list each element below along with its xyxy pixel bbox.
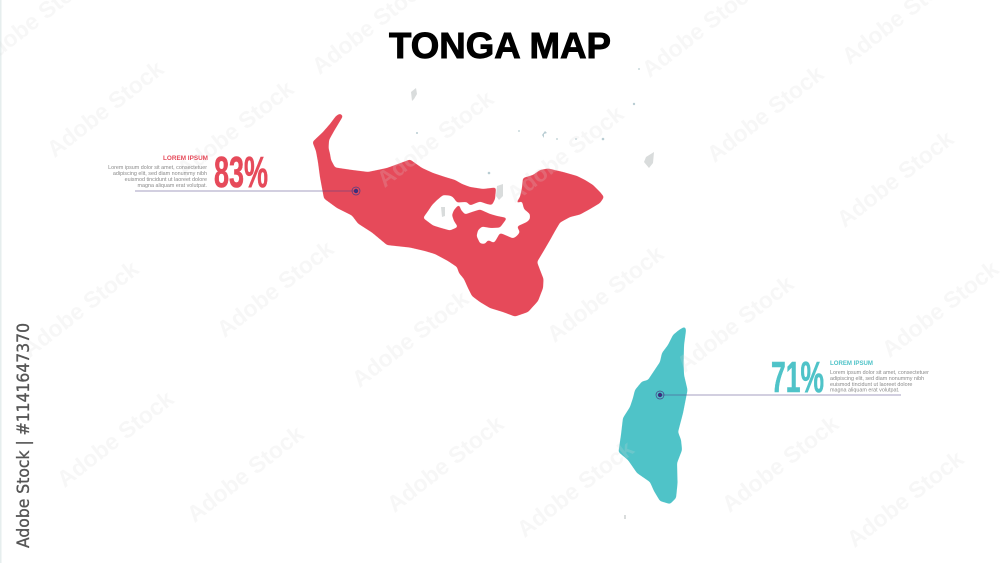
stock watermark pattern: Adobe Stock (512, 435, 639, 542)
stock credit: Adobe Stock | #1141647370 (14, 323, 34, 548)
callout body text: euismod tincidunt ut laoreet dolore (830, 382, 912, 388)
map: small grey islands (411, 68, 654, 519)
stock watermark pattern: Adobe Stock (372, 85, 499, 192)
callout body text: Lorem ipsum dolor sit amet, consectetuer (830, 370, 929, 376)
stock watermark pattern: Adobe Stock (347, 285, 474, 392)
stock watermark pattern: Adobe Stock (672, 270, 799, 377)
stock watermark pattern: Adobe Stock (832, 125, 959, 232)
title: TONGA MAP (389, 25, 611, 66)
callout body text: magna aliquam erat volutpat. (830, 388, 900, 394)
stock watermark pattern: Adobe Stock (502, 100, 629, 207)
stock watermark pattern: Adobe Stock (42, 55, 169, 162)
stock watermark pattern: Adobe Stock (877, 255, 1000, 362)
callout body text: Lorem ipsum dolor sit amet, consectetuer (108, 165, 207, 171)
map: red region (312, 114, 604, 316)
callout: red 83% (108, 148, 360, 197)
stock watermark pattern: Adobe Stock (212, 235, 339, 342)
stock watermark pattern: Adobe Stock (52, 385, 179, 492)
stock watermark pattern: Adobe Stock (182, 420, 309, 527)
stock watermark pattern: Adobe Stock (172, 75, 299, 182)
stock watermark pattern: Adobe Stock (382, 410, 509, 517)
stock watermark pattern: Adobe Stock (17, 255, 144, 362)
callout body text: magna aliquam erat volutpat. (137, 183, 207, 189)
callout body text (830, 370, 929, 394)
callout leader line (660, 394, 901, 396)
callout marker (656, 391, 664, 399)
stock watermark pattern: Adobe Stock (842, 445, 969, 552)
stock watermark pattern: Adobe Stock (542, 240, 669, 347)
callout body text: euismod tincidunt ut laoreet dolore (125, 177, 207, 183)
stock watermark pattern: Adobe Stock (717, 410, 844, 517)
callout body text (108, 165, 207, 189)
callout value: 83% (214, 148, 268, 197)
callout marker (352, 187, 360, 195)
callout heading: LOREM IPSUM (830, 361, 873, 367)
callout value: 71% (771, 353, 824, 402)
map: teal region (618, 326, 688, 504)
callout: teal 71% (656, 353, 929, 402)
callout leader line (135, 190, 356, 192)
callout body text: adipiscing elit, sed diam nonummy nibh (113, 171, 207, 177)
callout heading: LOREM IPSUM (163, 156, 208, 162)
stock watermark pattern: Adobe Stock (702, 60, 829, 167)
callout body text: adipiscing elit, sed diam nonummy nibh (830, 376, 924, 382)
